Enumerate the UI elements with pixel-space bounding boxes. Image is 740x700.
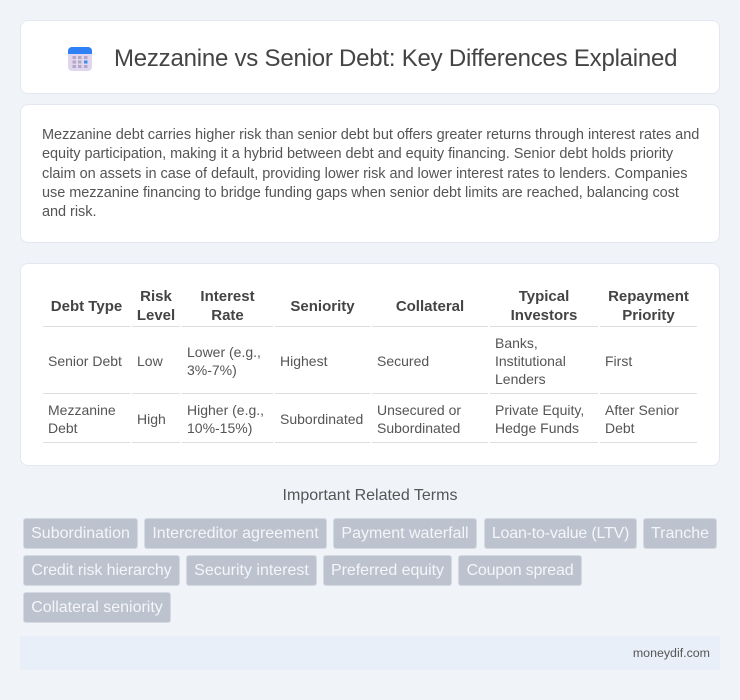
footer bar [20, 636, 720, 670]
table header: Repayment [608, 288, 689, 305]
intro text panel [20, 104, 720, 243]
table header: Collateral [396, 298, 464, 315]
tag: Loan-to-value (LTV) [492, 525, 629, 542]
table header: Typical [519, 288, 569, 305]
header card [20, 20, 720, 94]
tag [323, 555, 452, 586]
title: Mezzanine vs Senior Debt: Key Differences Explained [114, 45, 677, 72]
tag [144, 518, 327, 549]
tag [484, 518, 637, 549]
row: mezzanine debt: Debt [605, 420, 635, 436]
row: senior debt: Lenders [495, 371, 546, 387]
row: mezzanine debt: High [137, 411, 166, 427]
table header: Debt Type [51, 298, 122, 315]
tag [23, 592, 171, 623]
row: senior debt: Lower (e.g., [187, 344, 261, 360]
row: mezzanine debt: Subordinated [280, 411, 363, 427]
row: mezzanine debt: Higher (e.g., [187, 402, 264, 418]
related terms tags [23, 518, 717, 623]
tag: Collateral seniority [31, 599, 163, 616]
tag: Payment waterfall [341, 525, 469, 542]
row: senior debt [43, 326, 697, 387]
row: mezzanine debt: Hedge Funds [495, 420, 579, 436]
table header: Interest [200, 288, 255, 305]
row: senior debt: Banks, [495, 335, 538, 351]
tag [186, 555, 317, 586]
row: mezzanine debt: 10%-15%) [187, 420, 252, 436]
tag [643, 518, 717, 549]
tag: Coupon spread [467, 562, 573, 579]
footer source text: moneydif.com [633, 646, 710, 660]
tag: Subordination [31, 525, 130, 542]
table header: Rate [211, 307, 244, 324]
tag [23, 518, 138, 549]
intro paragraph: equity participation, making it a hybrid between debt and equity financing. Senior debt holds priority [42, 146, 673, 162]
row: mezzanine debt: Debt [48, 420, 78, 436]
tag: Preferred equity [331, 562, 444, 579]
tag: Security interest [194, 562, 309, 579]
table header: Risk [140, 288, 172, 305]
tag [23, 555, 180, 586]
intro paragraph: use mezzanine financing to bridge funding gaps when senior debt limits are reached, balancing cost [42, 185, 679, 201]
tag: Credit risk hierarchy [31, 562, 172, 579]
row: senior debt: Low [137, 353, 163, 369]
table header: Priority [622, 307, 675, 324]
table header [51, 288, 689, 324]
table header: Level [137, 307, 175, 324]
intro paragraph: and risk. [42, 204, 96, 220]
intro paragraph [42, 127, 699, 220]
row: senior debt: Highest [280, 353, 327, 369]
comparison table panel [20, 263, 720, 466]
tag [333, 518, 477, 549]
row: mezzanine debt [43, 393, 697, 443]
row: senior debt: Senior Debt [48, 353, 122, 369]
table header: Seniority [290, 298, 355, 315]
related terms heading: Important Related Terms [283, 487, 457, 504]
intro paragraph: claim on assets in case of default, providing lower risk and lower interest rates to lenders. Companies [42, 166, 687, 182]
row: senior debt: 3%-7%) [187, 362, 237, 378]
row: senior debt: Secured [377, 353, 429, 369]
icon: calendar [68, 47, 92, 71]
row: senior debt: Institutional [495, 353, 566, 369]
row: mezzanine debt: Mezzanine [48, 402, 116, 418]
intro paragraph: Mezzanine debt carries higher risk than senior debt but offers greater returns through interest rates and [42, 127, 699, 143]
row: mezzanine debt: Unsecured or [377, 402, 461, 418]
row: senior debt: First [605, 353, 632, 369]
row: mezzanine debt: Subordinated [377, 420, 460, 436]
row: mezzanine debt: Private Equity, [495, 402, 584, 418]
row: mezzanine debt: After Senior [605, 402, 679, 418]
tag: Tranche [651, 525, 709, 542]
tag: Intercreditor agreement [152, 525, 319, 542]
tag [458, 555, 582, 586]
table header: Investors [511, 307, 577, 324]
